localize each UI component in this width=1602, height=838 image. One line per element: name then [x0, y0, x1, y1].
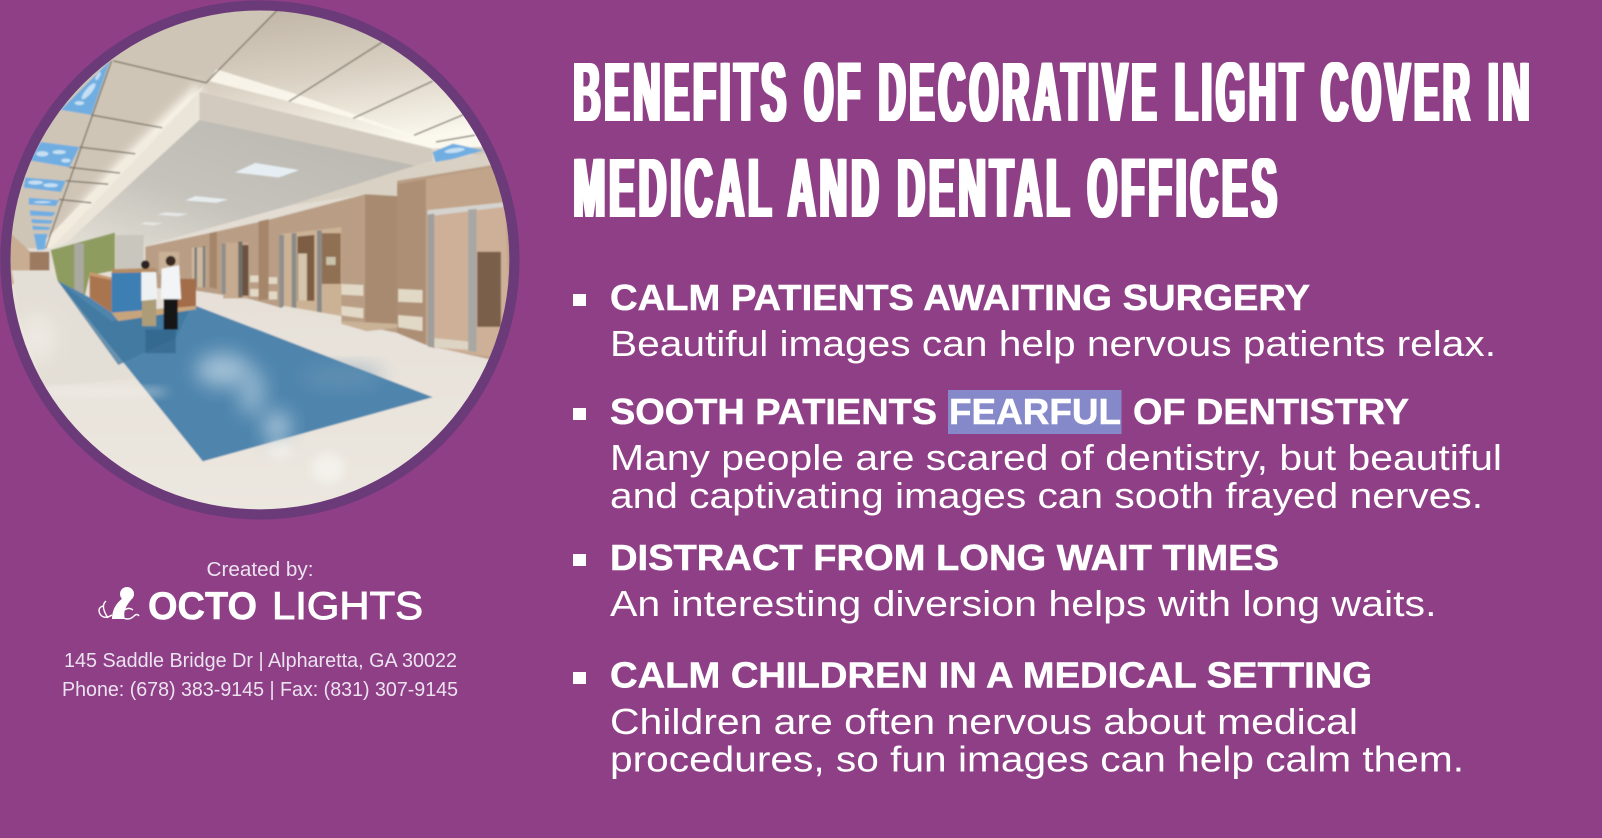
address: 145 Saddle Bridge Dr | Alpharetta, GA 30022 — [64, 650, 457, 672]
wordmark lights: LIGHTS — [272, 585, 423, 628]
right ceiling strip — [296, 154, 490, 204]
doctors — [141, 256, 181, 353]
benefit: calm patients awaiting surgery — [573, 277, 1496, 364]
benefit: distract from long wait times — [573, 537, 1436, 624]
glass doors — [159, 202, 510, 360]
bullet — [573, 408, 586, 420]
heading: CALM PATIENTS AWAITING SURGERY — [610, 277, 1310, 318]
created by: Created by: — [206, 559, 314, 581]
wordmark octo: OCTO — [148, 585, 257, 628]
icon: octopus — [99, 587, 139, 619]
bright floor spots — [314, 455, 342, 482]
benefit: sooth patients fearful of dentistry: and captivating images can sooth frayed nerves. — [610, 475, 1483, 516]
phone and fax: Phone: (678) 383-9145 | Fax: (831) 307-9145 — [62, 679, 458, 701]
heading: CALM CHILDREN IN A MEDICAL SETTING — [610, 654, 1372, 696]
reception desk — [90, 268, 196, 321]
soffit lights — [235, 163, 299, 177]
blue floor inlay — [57, 281, 433, 461]
hallway scene — [10, 10, 510, 510]
description: Many people are scared of dentistry, but beautiful — [610, 437, 1502, 478]
soffit — [199, 92, 433, 166]
benefit: calm children in a medical setting: procedures, so fun images can help calm them. — [610, 738, 1464, 780]
benefit: sooth patients fearful of dentistry — [573, 390, 1502, 516]
sky light panels — [24, 61, 483, 250]
description: Children are often nervous about medical — [610, 701, 1358, 742]
credit block — [62, 559, 458, 701]
title — [574, 45, 1534, 235]
ceiling — [12, 10, 486, 249]
description: Beautiful images can help nervous patients relax. — [610, 323, 1496, 364]
heading: SOOTH PATIENTS — [610, 391, 937, 432]
wall rails — [250, 275, 422, 331]
highlight on fearful — [948, 390, 1122, 434]
bullet — [573, 672, 586, 684]
description: An interesting diversion helps with long waits. — [610, 583, 1436, 624]
bullet — [573, 294, 586, 306]
ring — [0, 0, 520, 520]
right wall — [144, 164, 492, 334]
heading: DISTRACT FROM LONG WAIT TIMES — [610, 537, 1279, 578]
logo: octo lights — [99, 585, 423, 628]
heading: FEARFUL — [949, 391, 1121, 432]
heading: OF DENTISTRY — [1133, 391, 1409, 432]
circular hallway photo with ring — [0, 0, 530, 530]
benefit: calm children in a medical setting — [573, 654, 1464, 780]
floor reflections — [11, 270, 30, 284]
far and left walls — [10, 234, 31, 286]
bullet — [573, 554, 586, 566]
